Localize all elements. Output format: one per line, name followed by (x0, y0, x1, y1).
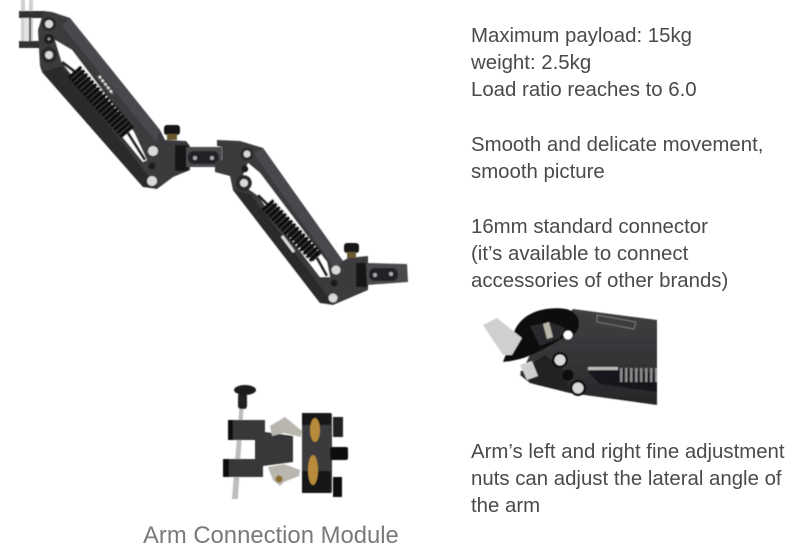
text: standard connector (471, 216, 728, 292)
text: payload specs (470, 25, 697, 101)
text: standard connector: (it’s available to connect (471, 243, 689, 265)
photo: connecting link (186, 147, 222, 167)
photo: arm connection module (223, 385, 348, 498)
photo: lower arm segment (215, 140, 408, 305)
photo: arm end close-up (483, 308, 657, 405)
text: fine adjustment nuts (471, 441, 785, 517)
photo: upper arm segment (19, 0, 190, 189)
text: fine adjustment nuts: nuts can adjust the lateral angle of (471, 468, 782, 490)
text: fine adjustment nuts: the arm (471, 495, 540, 517)
mount rods (21, 0, 33, 42)
text: smooth movement (471, 134, 763, 183)
text: payload specs: Load ratio reaches to 6.0 (471, 79, 697, 101)
text: payload specs: Maximum payload: 15kg (471, 25, 692, 47)
text: standard connector: 16mm standard connector (471, 216, 708, 238)
text: fine adjustment nuts: Arm’s left and right fine adjustment (471, 441, 785, 463)
text: smooth movement: smooth picture (471, 161, 605, 183)
text: standard connector: accessories of other brands) (471, 270, 728, 292)
text: smooth movement: Smooth and delicate movement, (471, 134, 763, 156)
text: payload specs: weight: 2.5kg (470, 52, 591, 74)
